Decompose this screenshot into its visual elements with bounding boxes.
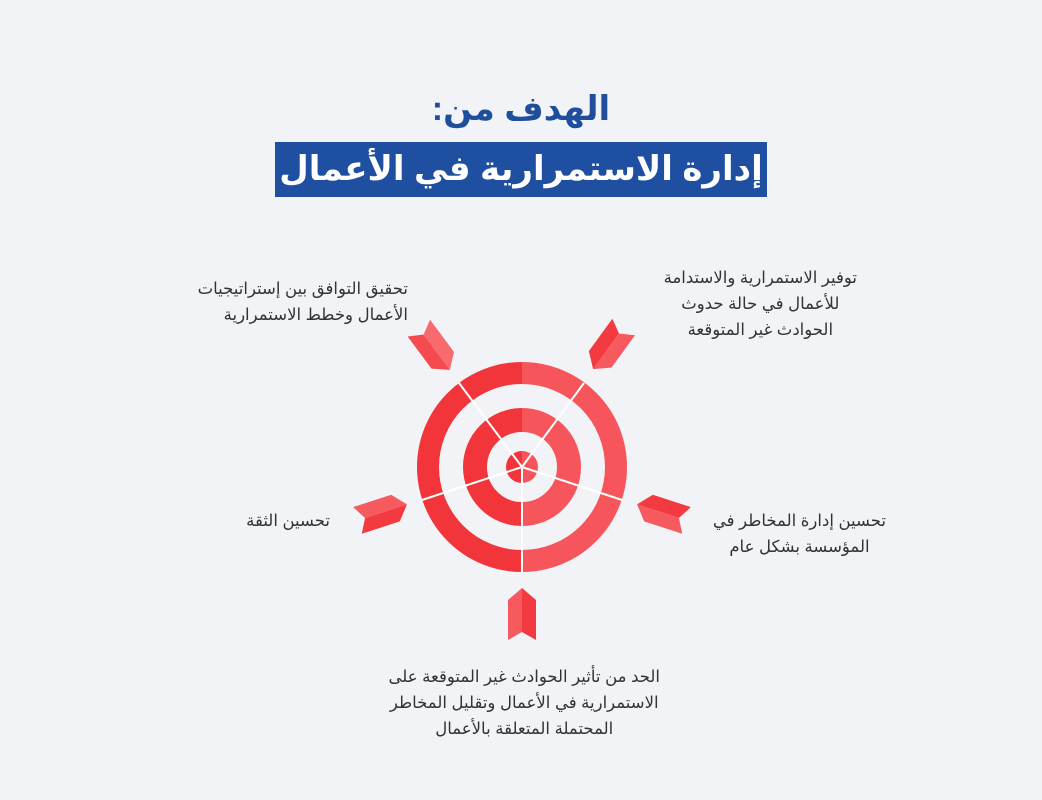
title: الهدف من: [432,90,610,128]
text: top right: توفير الاستمرارية والاستدامة [664,269,857,287]
arrows [353,319,691,640]
text: top left: تحقيق التوافق بين إستراتيجيات [198,280,408,298]
text: bottom: الاستمرارية في الأعمال وتقليل المخاطر [390,694,659,712]
banner [275,142,767,197]
text: top left: الأعمال وخطط الاستمرارية [224,306,408,324]
banner: إدارة الاستمرارية في الأعمال [279,150,763,188]
text: right: تحسين إدارة المخاطر في [713,512,886,530]
text: right [713,512,886,556]
target [422,373,622,572]
text: top right: الحوادث غير المتوقعة [688,321,833,339]
text: bottom: المحتملة المتعلقة بالأعمال [435,720,613,738]
text: top right [664,269,857,339]
text: top left [198,280,408,324]
text: left: تحسين الثقة [246,512,330,530]
text: bottom: الحد من تأثير الحوادث غير المتوقعة على [388,668,660,686]
text: right: المؤسسة بشكل عام [729,538,870,556]
text: bottom [388,665,660,738]
text: top right: للأعمال في حالة حدوث [681,295,839,313]
